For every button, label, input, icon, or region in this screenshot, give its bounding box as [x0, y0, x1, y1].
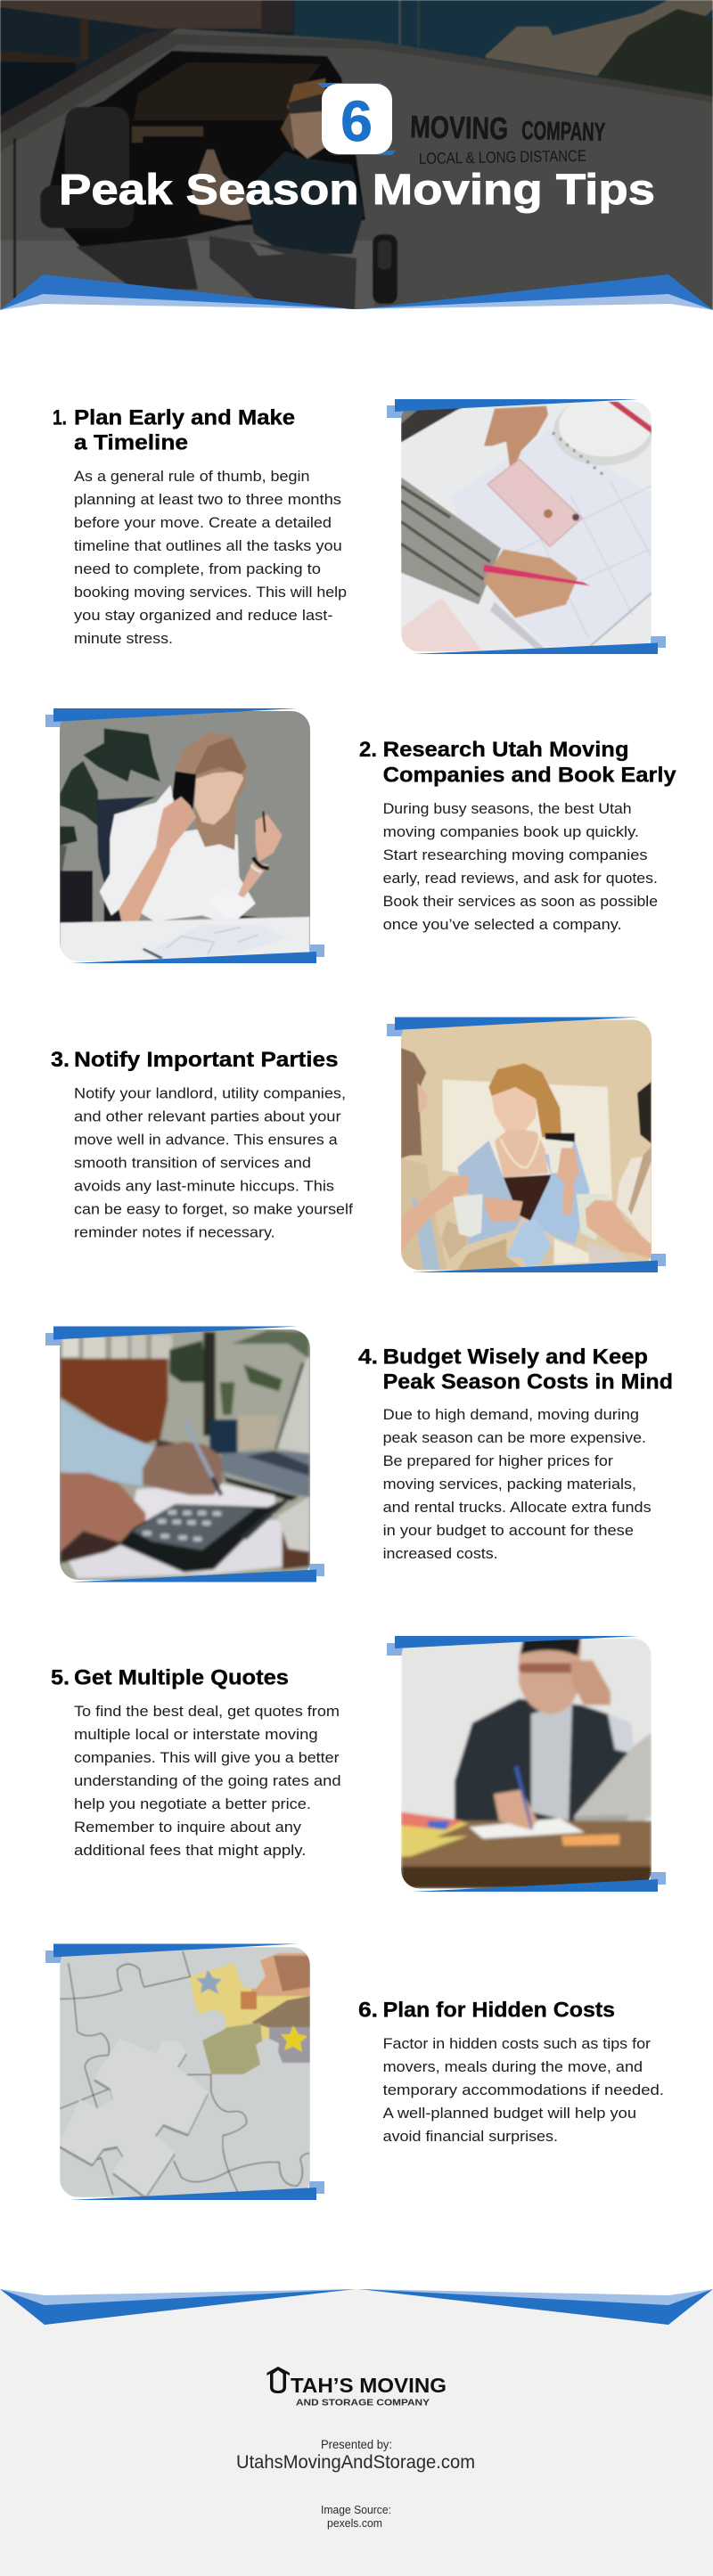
- text block: tip 3: move well in advance. This ensures a: [74, 1132, 339, 1148]
- heading: tip 4: Budget Wisely and Keep: [383, 1345, 648, 1369]
- text block: tip 2: Start researching moving companies: [383, 847, 648, 863]
- text block: tip 1: As a general rule of thumb, begin: [74, 469, 310, 485]
- title: Peak Season Moving Tips: [59, 167, 655, 214]
- panel: tip 1: [53, 394, 666, 654]
- heading: tip 2: [359, 738, 676, 788]
- heading: tip 2: 2.: [359, 738, 377, 762]
- text block: tip 1: [74, 469, 347, 647]
- text block: tip 6: movers, meals during the move, and: [383, 2059, 643, 2075]
- heading: tip 2: Companies and Book Early: [383, 763, 676, 788]
- heading: tip 1: a Timeline: [74, 431, 188, 454]
- heading: tip 4: Peak Season Costs in Mind: [383, 1370, 673, 1394]
- photo: women talking over coffee: [387, 1016, 666, 1279]
- text block: tip 5: multiple local or interstate moving: [74, 1727, 318, 1743]
- text block: tip 4: moving services, packing materials,: [383, 1476, 636, 1492]
- text block: tip 1: booking moving services. This will help: [74, 585, 347, 601]
- text block: tip 2: once you’ve selected a company.: [383, 917, 622, 933]
- text block: tip 3: smooth transition of services and: [74, 1155, 311, 1171]
- image source: pexels.com: [327, 2516, 382, 2530]
- text block: tip 1: need to complete, from packing to: [74, 561, 321, 577]
- text block: tip 2: moving companies book up quickly.: [383, 824, 639, 840]
- text block: tip 4: Due to high demand, moving during: [383, 1407, 639, 1423]
- photo: planning on a calendar: [387, 394, 666, 654]
- heading: tip 1: 1.: [53, 406, 67, 429]
- text block: tip 5: additional fees that might apply.: [74, 1843, 306, 1859]
- text block: tip 1: you stay organized and reduce last-: [74, 608, 333, 624]
- heading: tip 3: 3.: [51, 1048, 70, 1072]
- text block: tip 5: [74, 1704, 341, 1859]
- heading: tip 4: 4.: [358, 1345, 378, 1369]
- panel: tip 3: [51, 1016, 666, 1279]
- image source: [321, 2503, 391, 2530]
- panel: tip 6: [45, 1944, 664, 2200]
- text block: tip 6: avoid financial surprises.: [383, 2129, 558, 2145]
- text block: tip 4: peak season can be more expensive.: [383, 1430, 646, 1446]
- van lettering: [412, 116, 606, 164]
- logo: TAH’S MOVING: [291, 2374, 447, 2397]
- presented by: Presented by:: [321, 2438, 392, 2451]
- text block: tip 2: early, read reviews, and ask for quotes.: [383, 871, 658, 887]
- text block: tip 5: companies. This will give you a better: [74, 1750, 340, 1766]
- panel: tip 5: [51, 1636, 666, 1892]
- text block: tip 4: [383, 1407, 652, 1562]
- photo: calculator and budget papers: [45, 1326, 324, 1589]
- heading: tip 1: [53, 406, 295, 454]
- heading: tip 4: [358, 1345, 673, 1394]
- van lettering: MOVING: [410, 110, 509, 146]
- text block: tip 3: [74, 1085, 353, 1240]
- text block: tip 5: Remember to inquire about any: [74, 1820, 302, 1836]
- photo: woman on the phone at desk: [45, 707, 324, 970]
- image source: Image Source:: [321, 2503, 391, 2516]
- text block: tip 5: To find the best deal, get quotes from: [74, 1704, 340, 1720]
- heading: tip 6: 6.: [358, 1999, 378, 2023]
- text block: tip 4: Be prepared for higher prices for: [383, 1453, 613, 1469]
- text block: tip 2: Book their services as soon as possible: [383, 894, 658, 910]
- presented by: UtahsMovingAndStorage.com: [236, 2452, 475, 2473]
- text block: tip 6: temporary accommodations if needed.: [383, 2082, 664, 2098]
- text block: tip 1: minute stress.: [74, 631, 173, 647]
- text block: tip 1: planning at least two to three months: [74, 492, 341, 508]
- footer background: [0, 2289, 713, 2576]
- hero photo: moving van with driver: [0, 0, 713, 310]
- text block: tip 3: and other relevant parties about your: [74, 1108, 341, 1124]
- number badge: 6: [340, 89, 373, 153]
- van lettering: LOCAL & LONG DISTANCE: [419, 147, 586, 168]
- logo: [267, 2367, 447, 2408]
- panel: footer: [0, 2289, 713, 2576]
- text block: tip 1: before your move. Create a detailed: [74, 515, 332, 531]
- text block: tip 6: Factor in hidden costs such as tips for: [383, 2036, 652, 2052]
- text block: tip 4: increased costs.: [383, 1546, 498, 1562]
- panel: hero header: [0, 0, 713, 310]
- footer blue wedges: [0, 2289, 713, 2325]
- text block: tip 2: During busy seasons, the best Utah: [383, 801, 632, 817]
- text block: tip 5: understanding of the going rates and: [74, 1773, 341, 1789]
- presented by: [236, 2438, 475, 2473]
- heading: tip 2: Research Utah Moving: [383, 738, 629, 762]
- text block: tip 3: reminder notes if necessary.: [74, 1224, 275, 1240]
- text block: tip 1: timeline that outlines all the tasks you: [74, 538, 342, 554]
- text block: tip 4: and rental trucks. Allocate extra funds: [383, 1500, 652, 1516]
- text block: tip 6: A well-planned budget will help you: [383, 2106, 636, 2122]
- text block: tip 3: avoids any last-minute hiccups. This: [74, 1178, 334, 1194]
- photo: puzzle pieces over money: [45, 1944, 324, 2200]
- heading: tip 5: 5.: [51, 1666, 70, 1689]
- heading: tip 5: Get Multiple Quotes: [74, 1666, 289, 1689]
- logo: AND STORAGE COMPANY: [296, 2398, 430, 2408]
- number badge: [316, 83, 396, 155]
- text block: tip 5: help you negotiate a better price.: [74, 1796, 311, 1812]
- wave divider: blue wedges: [0, 274, 713, 310]
- text block: tip 3: Notify your landlord, utility companies,: [74, 1085, 346, 1101]
- text block: tip 4: in your budget to account for these: [383, 1523, 634, 1539]
- panel: tip 2: [45, 707, 676, 970]
- heading: tip 6: Plan for Hidden Costs: [383, 1999, 615, 2023]
- heading: tip 1: Plan Early and Make: [74, 406, 295, 429]
- panel: tip 4: [45, 1326, 673, 1589]
- van lettering: COMPANY: [521, 117, 606, 147]
- heading: tip 3: Notify Important Parties: [74, 1048, 339, 1072]
- text block: tip 3: can be easy to forget, so make yourself: [74, 1201, 353, 1217]
- text block: tip 6: [383, 2036, 664, 2145]
- text block: tip 2: [383, 801, 658, 933]
- photo: businessman on phone writing: [387, 1636, 666, 1892]
